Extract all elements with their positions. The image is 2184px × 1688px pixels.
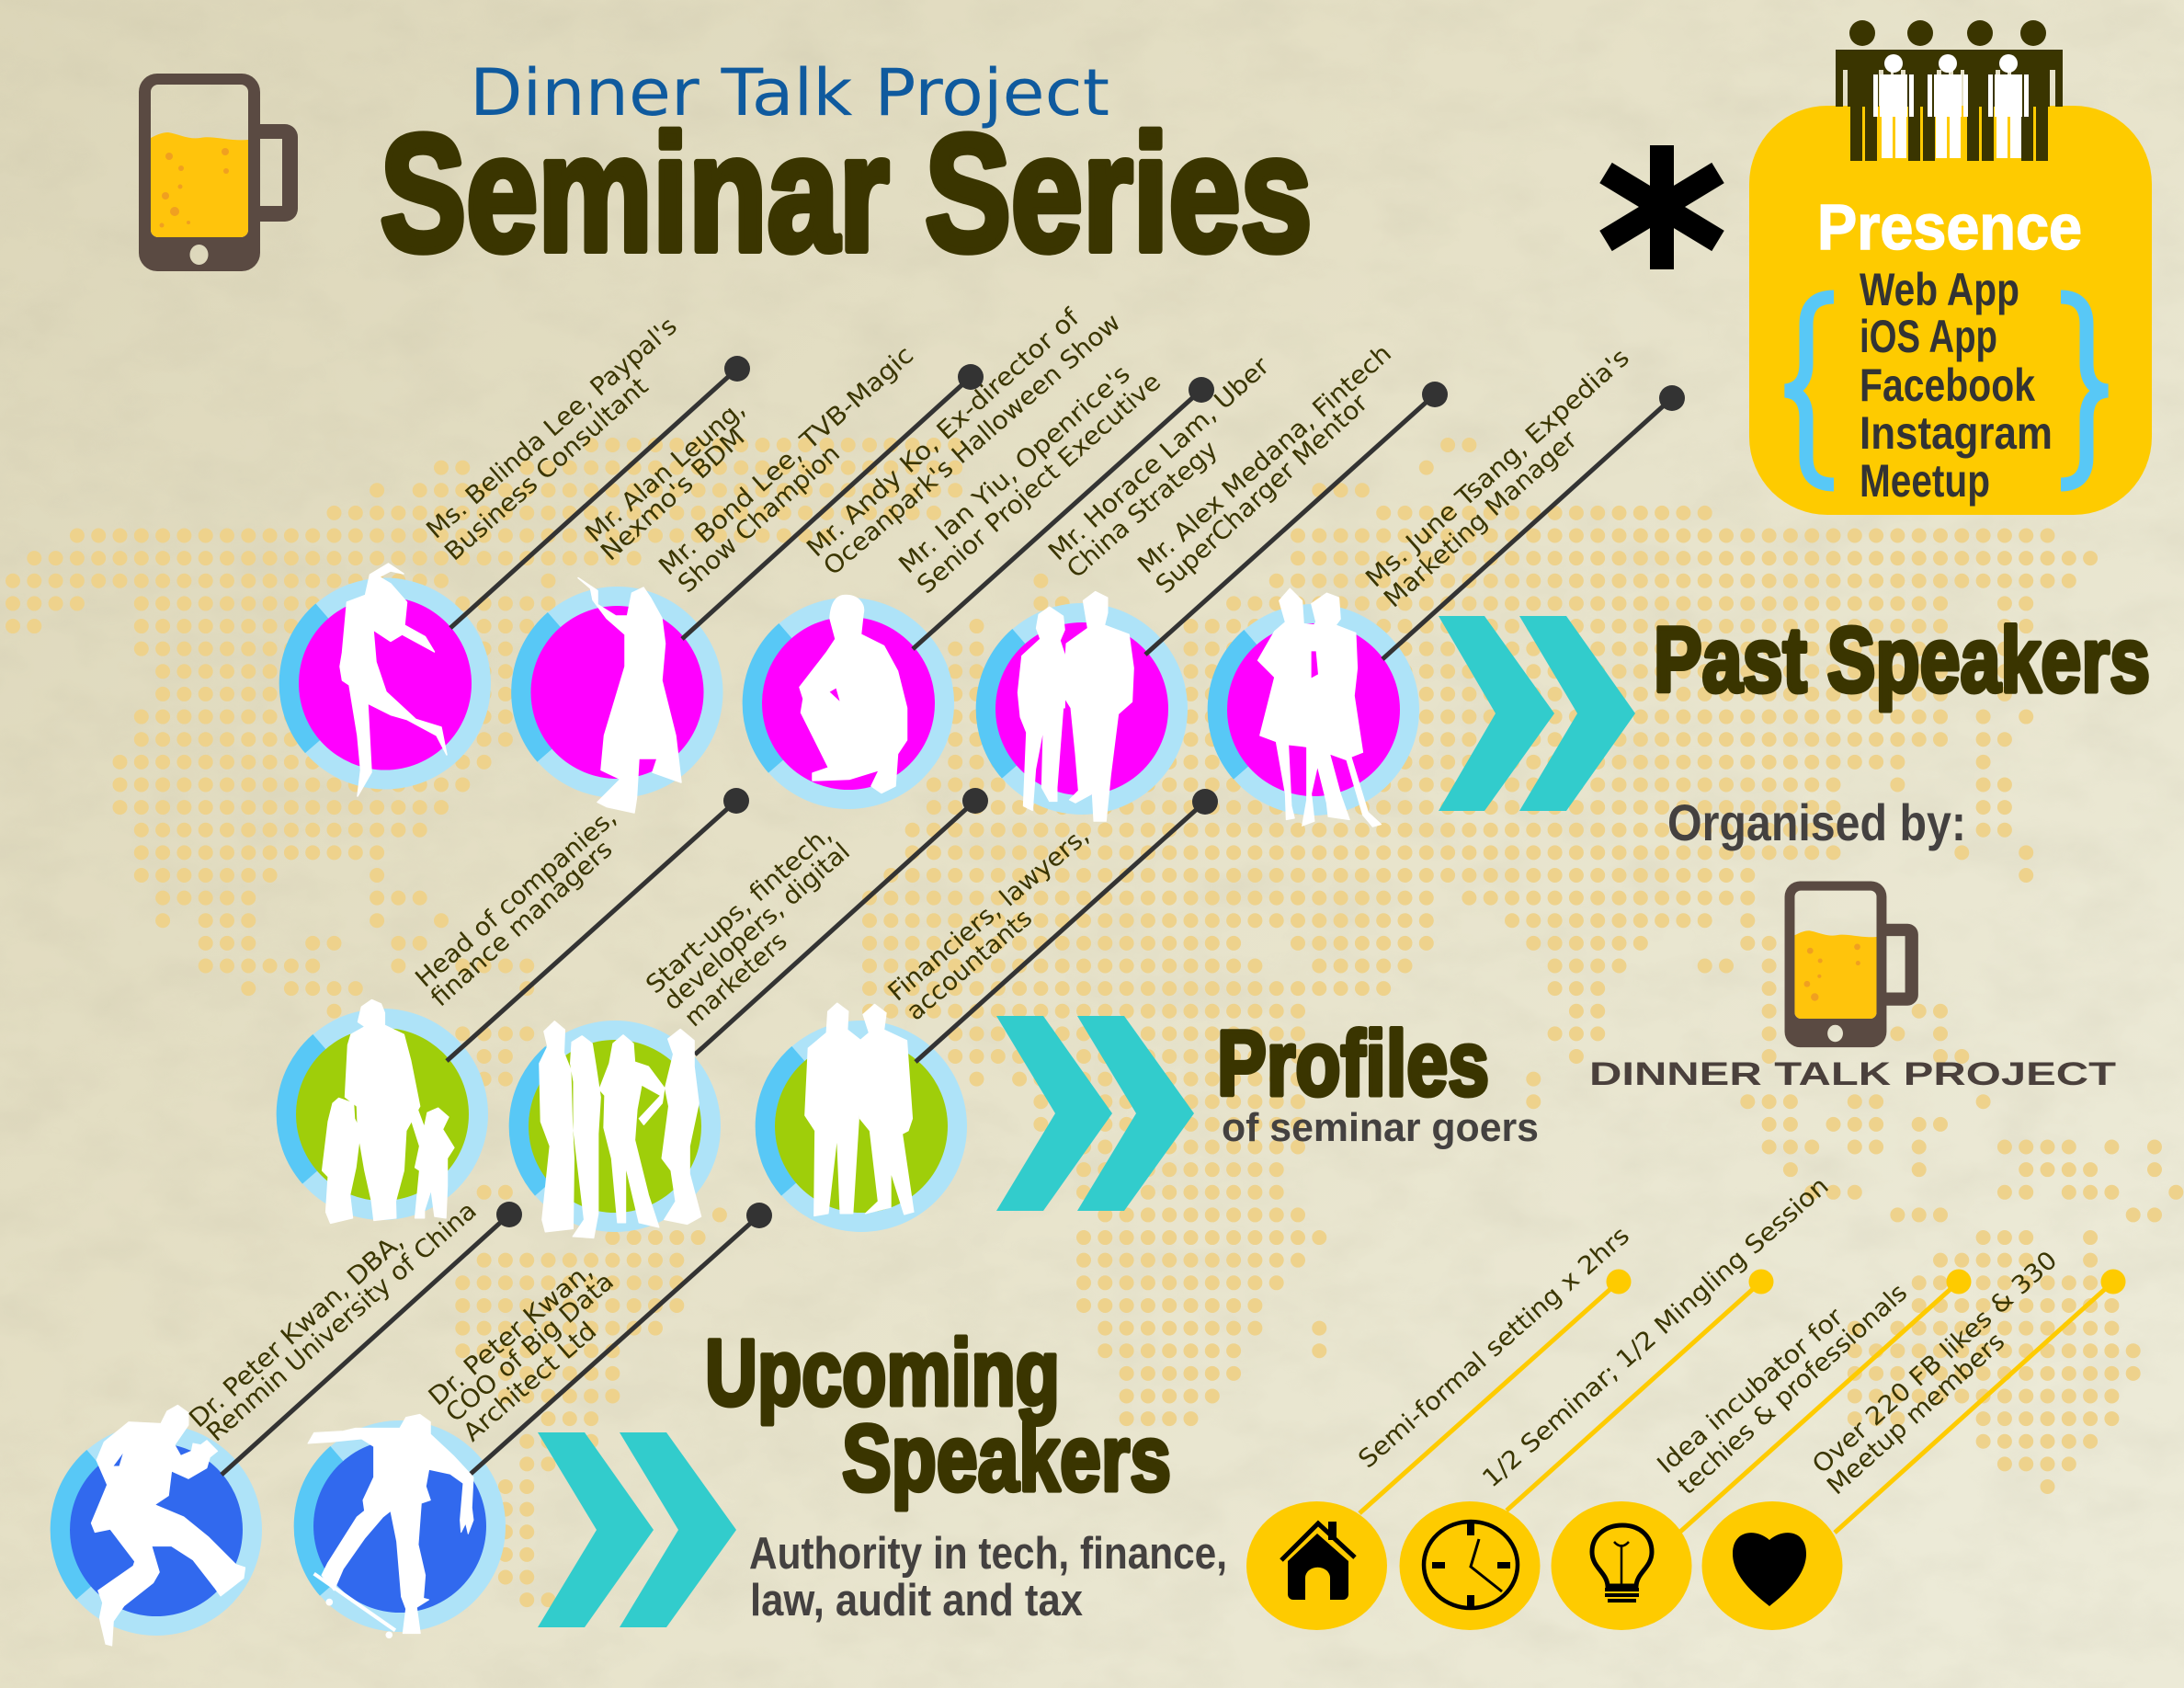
presence list: Facebook — [1860, 359, 2035, 411]
circle: speaker 1 — [279, 577, 491, 789]
speaker labels: Show Champion — [673, 439, 846, 599]
speaker labels: Mr. Alan Leung, — [580, 394, 751, 548]
presence list: iOS App — [1860, 311, 1997, 362]
speaker labels: Senior Project Executive — [912, 368, 1166, 599]
chevrons: upcoming — [538, 1432, 736, 1627]
profile labels: developers, digital — [658, 838, 856, 1016]
presence list: Instagram — [1860, 407, 2053, 459]
upcoming labels: Dr. Peter Kwan, — [423, 1257, 598, 1411]
connector lines: features — [1359, 1269, 2125, 1533]
profile labels: Financiers, lawyers, — [882, 821, 1095, 1007]
upcoming description — [749, 1529, 1227, 1625]
speaker labels: Mr. Alex Medana, Fintech — [1132, 339, 1397, 579]
icon: heart — [1702, 1501, 1842, 1630]
speaker labels: Mr. Ian Yiu, Openrice's — [893, 359, 1136, 579]
heading: speakers: Speakers — [842, 1406, 1171, 1511]
speaker labels: China Strategy — [1062, 436, 1223, 584]
feature labels: techies & professionals — [1673, 1279, 1913, 1500]
circle: upcoming 2 — [294, 1420, 506, 1632]
circle: profile 2 — [509, 1021, 721, 1232]
asterisk — [1606, 145, 1718, 269]
upcoming labels: Dr. Peter Kwan, DBA, — [184, 1226, 409, 1433]
upcoming labels: Renmin University of China — [201, 1196, 483, 1447]
chevrons: past speakers — [1439, 616, 1635, 811]
profile labels: Head of companies, — [410, 804, 622, 993]
speaker labels: Ms. Belinda Lee, Paypal's — [421, 312, 683, 544]
speaker labels — [421, 302, 1635, 613]
circle: speaker 3 — [743, 598, 954, 809]
speaker labels: Nexmo's BDM — [596, 423, 751, 566]
upcoming labels — [184, 1196, 620, 1447]
icon: light bulb — [1552, 1501, 1691, 1630]
presence list: Web App — [1860, 264, 2019, 315]
icon: braces — [1785, 297, 2108, 485]
circle: speaker 4 — [976, 603, 1188, 815]
profile labels: finance managers — [426, 835, 618, 1012]
icon: clock — [1399, 1501, 1541, 1630]
organiser wordmark: DINNER TALK PROJECT — [1589, 1056, 2116, 1092]
icon: people — [1836, 20, 2063, 161]
connector lines: upcoming — [222, 1202, 772, 1475]
circle: speaker 5 — [1208, 604, 1419, 815]
feature labels: Over 220 FB likes & 330 — [1807, 1246, 2063, 1479]
speaker labels: Mr. Horace Lam, Uber — [1043, 351, 1276, 566]
feature labels: Semi-formal setting x 2hrs — [1353, 1222, 1635, 1474]
logo: organiser mug — [1785, 881, 1918, 1047]
profile labels: accountants — [901, 904, 1038, 1026]
presence list — [1860, 264, 2053, 507]
feature labels: 1/2 Seminar; 1/2 Mingling Session — [1477, 1171, 1835, 1493]
profile labels — [410, 804, 1095, 1032]
profile labels: Start-ups, fintech, — [641, 820, 837, 999]
silhouettes: upcoming — [91, 1405, 473, 1646]
presence list: Meetup — [1860, 455, 1990, 507]
speaker labels: Marketing Manager — [1379, 425, 1584, 613]
circle: profile 3 — [756, 1021, 967, 1232]
connector lines: past speakers — [450, 356, 1685, 659]
speaker labels: Mr. Bond Lee, TVB-Magic — [654, 341, 919, 581]
speaker labels: SuperCharger Mentor — [1151, 388, 1374, 599]
title: Seminar Series — [381, 101, 1313, 286]
feature labels — [1353, 1171, 2063, 1500]
connector lines: profiles — [447, 788, 1218, 1062]
upcoming labels: Architect Ltd — [458, 1317, 602, 1447]
subtitle: Dinner Talk Project — [470, 55, 1109, 131]
logo: beer mug phone — [139, 74, 298, 271]
speaker labels: Oceanpark's Halloween Show — [818, 308, 1126, 581]
circle: upcoming 1 — [51, 1424, 262, 1636]
heading: profiles: Profiles — [1217, 1012, 1489, 1115]
profiles subheading: of seminar goers — [1222, 1105, 1539, 1150]
silhouettes: profiles — [323, 999, 914, 1238]
upcoming description: law, audit and tax — [750, 1576, 1083, 1625]
speaker labels: Ms. June Tsang, Expedia's — [1360, 343, 1635, 593]
feature labels: Meetup members — [1822, 1328, 2010, 1500]
circle: profile 1 — [277, 1009, 488, 1220]
circle: speaker 2 — [511, 587, 722, 798]
dotted world map — [13, 445, 2177, 1600]
presence heading: Presence — [1817, 191, 2082, 263]
panel: presence — [1749, 20, 2152, 515]
icon: house — [1246, 1501, 1387, 1630]
speaker labels: Business Consultant — [439, 372, 654, 566]
organised by: Organised by: — [1667, 793, 1966, 851]
silhouettes: past speakers — [340, 564, 1382, 827]
upcoming labels: COO of Big Data — [440, 1267, 620, 1428]
profile labels: marketers — [679, 927, 793, 1032]
upcoming description: Authority in tech, finance, — [749, 1529, 1227, 1579]
chevrons: profiles — [996, 1016, 1194, 1211]
feature labels: Idea incubator for — [1652, 1302, 1849, 1479]
heading: upcoming: Upcoming — [705, 1320, 1060, 1425]
speaker labels: Mr. Andy Ko, Ex-director of — [802, 302, 1086, 563]
